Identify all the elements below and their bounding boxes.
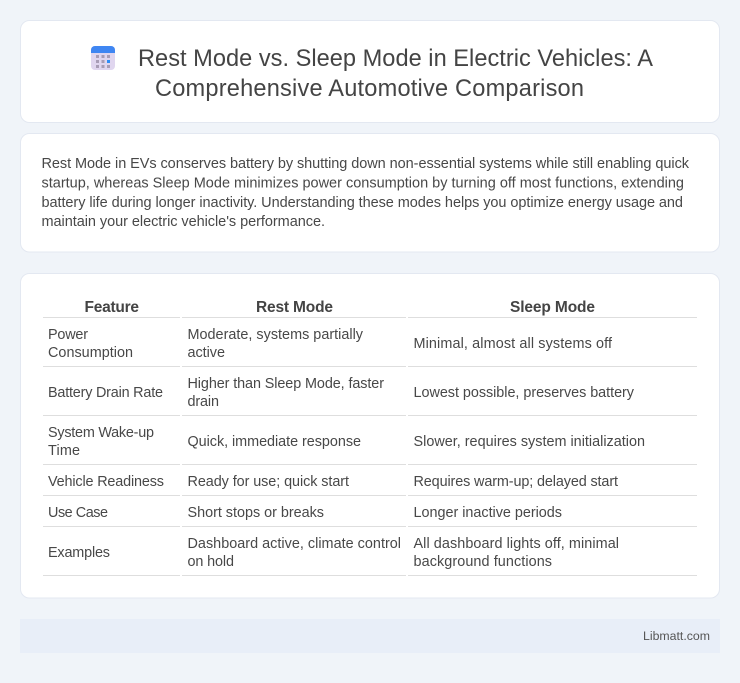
row: vehicle readiness (43, 474, 697, 496)
row: battery drain rate (43, 376, 697, 416)
icon: calendar (91, 46, 115, 70)
row: power consumption: Consumption (48, 345, 133, 361)
row: examples: Examples (48, 545, 110, 561)
intro paragraph (42, 156, 690, 230)
row: system wake-up time: Quick, immediate response (188, 434, 361, 450)
row: battery drain rate: Lowest possible, preserves battery (414, 385, 635, 401)
intro paragraph: battery life during longer inactivity. Understanding these modes helps you optimize energy usage and (42, 195, 683, 211)
footer: Libmatt.com (643, 629, 710, 643)
table header row: Feature (84, 299, 139, 316)
row: battery drain rate: Battery Drain Rate (48, 385, 163, 401)
row: examples: All dashboard lights off, minimal (414, 536, 619, 552)
row: examples: background functions (414, 554, 552, 570)
row: vehicle readiness: Requires warm-up; delayed start (414, 474, 618, 490)
intro paragraph: maintain your electric vehicle's performance. (42, 214, 325, 230)
row: use case: Short stops or breaks (188, 505, 324, 521)
row: battery drain rate: drain (188, 394, 219, 410)
table header row (43, 299, 697, 318)
title (138, 46, 653, 102)
row: power consumption: active (188, 345, 225, 361)
intro paragraph: Rest Mode in EVs conserves battery by shutting down non-essential systems while still enabling quick (42, 156, 690, 172)
row: battery drain rate: Higher than Sleep Mode, faster (188, 376, 384, 392)
row: system wake-up time: Slower, requires system initialization (414, 434, 645, 450)
row: examples: on hold (188, 554, 234, 570)
panel: header (20, 20, 720, 122)
row: power consumption: Power (48, 327, 88, 343)
row: examples (43, 536, 697, 576)
row: vehicle readiness: Ready for use; quick start (188, 474, 349, 490)
row: power consumption: Minimal, almost all systems off (414, 336, 613, 352)
title: Rest Mode vs. Sleep Mode in Electric Vehicles: A (138, 46, 653, 72)
row: power consumption (43, 327, 697, 367)
row: use case: Use Case (48, 505, 108, 521)
row: system wake-up time: System Wake-up (48, 425, 154, 441)
row: examples: Dashboard active, climate control (188, 536, 401, 552)
row: use case: Longer inactive periods (414, 505, 562, 521)
row: system wake-up time (43, 425, 697, 465)
title: Comprehensive Automotive Comparison (155, 76, 584, 102)
row: power consumption: Moderate, systems partially (188, 327, 364, 343)
panel: comparison table (20, 274, 720, 598)
panel: introduction (20, 134, 720, 252)
intro paragraph: startup, whereas Sleep Mode minimizes power consumption by turning off most functions, extending (42, 176, 684, 192)
table header row: Sleep Mode (510, 299, 595, 316)
footer (20, 619, 720, 653)
table header row: Rest Mode (256, 299, 333, 316)
row: system wake-up time: Time (48, 443, 80, 459)
row: use case (43, 505, 697, 527)
row: vehicle readiness: Vehicle Readiness (48, 474, 164, 490)
